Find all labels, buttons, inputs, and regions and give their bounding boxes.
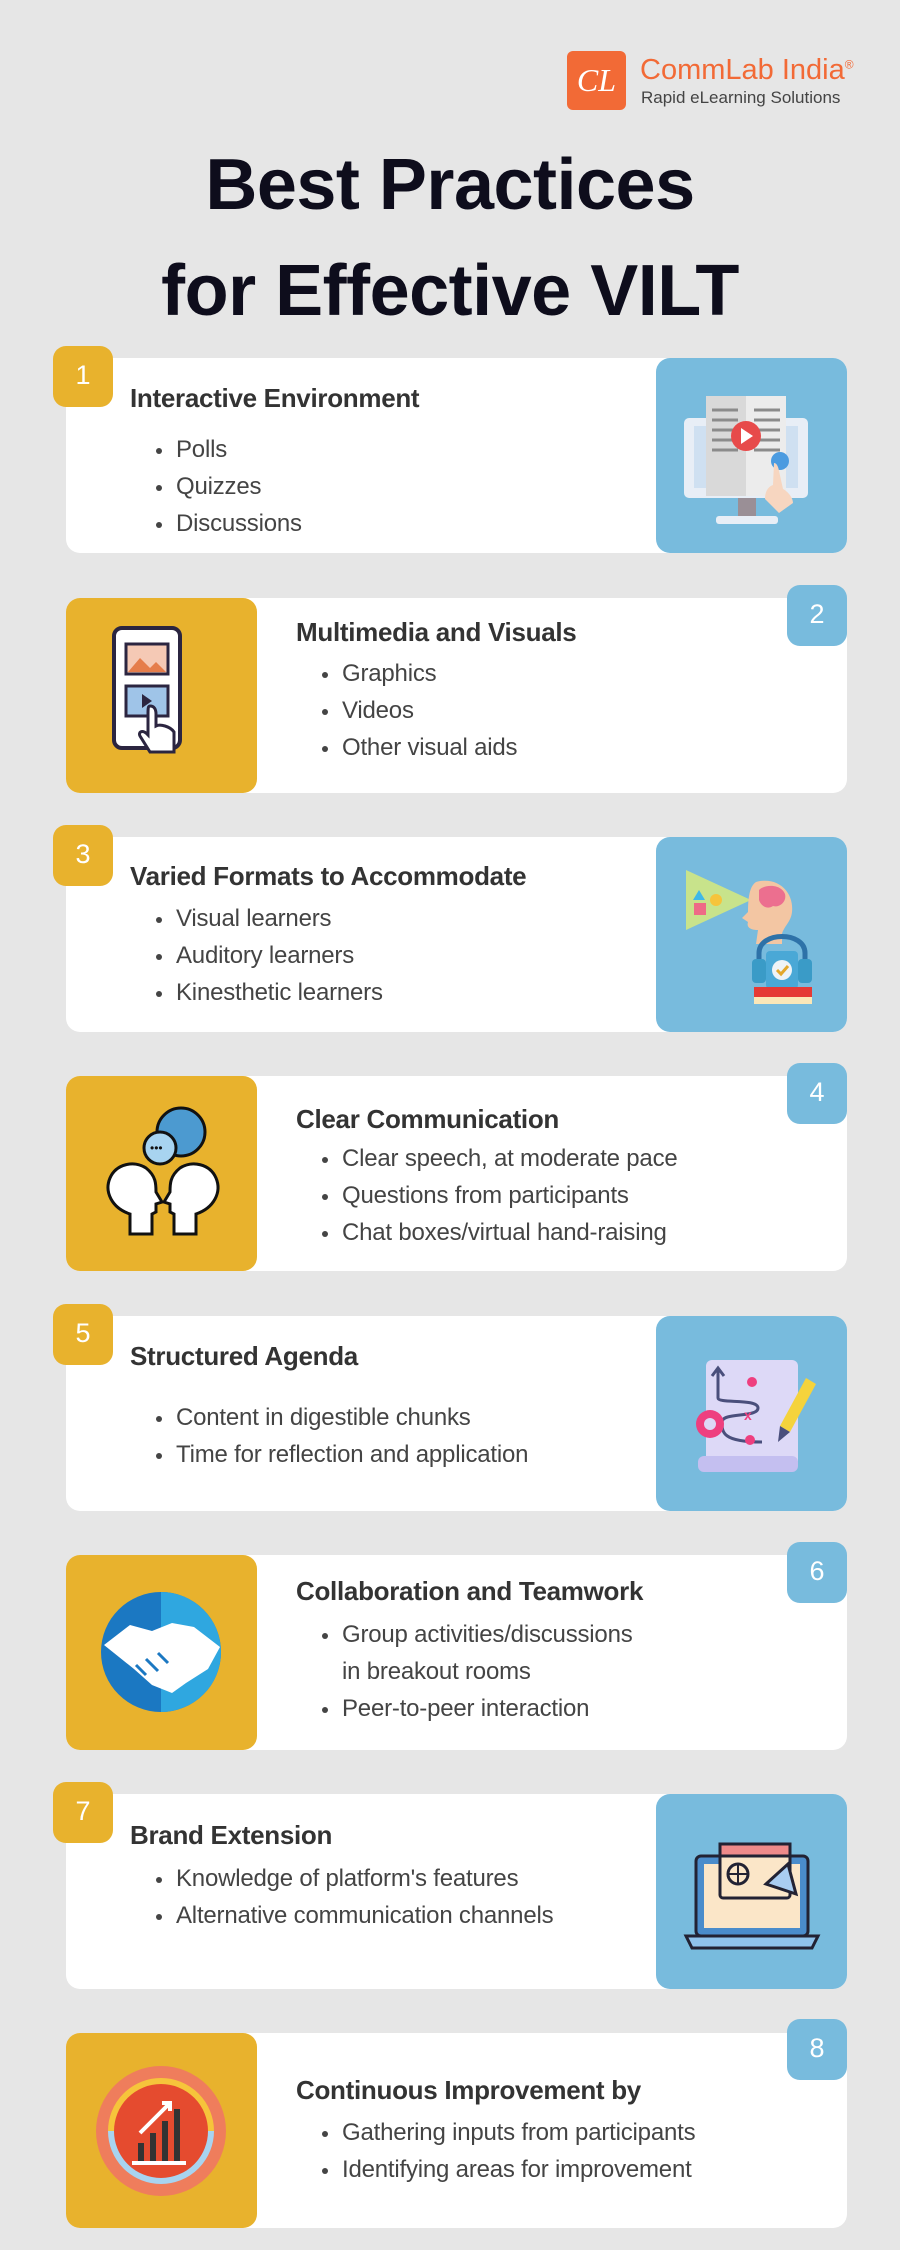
bullets [322,660,517,761]
badge 3: 3 [75,839,91,869]
bullets [322,1145,678,1246]
heading: Varied Formats to Accommodate [130,861,526,891]
badge 8 [787,2019,847,2080]
badge 2 [787,585,847,646]
bullets: Knowledge of platform's features [176,1865,518,1892]
icon: laptop with globe and megaphone [656,1794,847,1989]
badge 1 [53,346,113,407]
panel: 2 Multimedia and Visuals [66,598,847,793]
bullets [322,1621,633,1722]
bullets: Questions from participants [342,1182,629,1209]
title [161,145,739,331]
badge 6: 6 [809,1556,825,1586]
badge 6 [787,1542,847,1603]
bullets: Visual learners [176,905,331,932]
heading: Collaboration and Teamwork [296,1576,643,1606]
title: Best Practices [205,145,695,225]
bullets [156,905,383,1006]
badge 5: 5 [75,1318,91,1348]
bullets: Auditory learners [176,942,354,969]
bullets: Discussions [176,510,302,537]
panel: 6 Collaboration and Teamwork [66,1555,847,1750]
logo mark: CL [577,62,616,98]
logo mark [567,51,626,110]
badge 7 [53,1782,113,1843]
badge 4: 4 [809,1077,825,1107]
logo: Rapid eLearning Solutions [641,88,840,107]
bullets: Videos [342,697,414,724]
badge 3 [53,825,113,886]
logo [567,51,854,110]
badge 1: 1 [75,360,91,390]
bullets: Time for reflection and application [176,1441,528,1468]
icon: growth chart circle [66,2033,257,2228]
bullets: Alternative communication channels [176,1902,553,1929]
logo text: CommLab India® [640,54,854,86]
icon: two heads talking [66,1076,257,1271]
panel: 8 Continuous Improvement [66,2033,847,2228]
badge 7: 7 [75,1796,91,1826]
bullets: Content in digestible chunks [176,1404,471,1431]
bullets: Kinesthetic learners [176,979,383,1006]
icon: two heads talking: ••• [150,1141,163,1155]
panel: 5 Structured Agenda [66,1316,847,1511]
panel: 1 Interactive Environment [66,358,847,553]
icon: monitor with book [656,358,847,553]
bullets: Quizzes [176,473,261,500]
bullets: Other visual aids [342,734,517,761]
bullets [156,436,302,537]
badge 2: 2 [809,599,825,629]
bullets: Peer-to-peer interaction [342,1695,589,1722]
icon: plan with pencil: x [744,1407,752,1423]
panel: 4 Clear Communication [66,1076,847,1271]
bullets: Graphics [342,660,436,687]
badge 4 [787,1063,847,1124]
bullets: Clear speech, at moderate pace [342,1145,678,1172]
bullets: Chat boxes/virtual hand-raising [342,1219,667,1246]
heading: Continuous Improvement by [296,2075,641,2105]
bullets: Gathering inputs from participants [342,2119,695,2146]
title: for Effective VILT [161,251,739,331]
panel: 7 Brand Extension [66,1794,847,1989]
bullets: Polls [176,436,227,463]
bullets: Group activities/discussions [342,1621,633,1648]
bullets [156,1865,553,1929]
icon: multimedia tablet [66,598,257,793]
heading: Brand Extension [130,1820,332,1850]
heading: Multimedia and Visuals [296,617,576,647]
heading: Structured Agenda [130,1341,358,1371]
badge 5 [53,1304,113,1365]
bullets: in breakout rooms [342,1658,531,1685]
badge 8: 8 [809,2033,825,2063]
panel: 3 Varied Formats [66,837,847,1032]
bullets: Identifying areas for improvement [342,2156,692,2183]
icon: plan with pencil [656,1316,847,1511]
bullets [322,2119,695,2183]
icon: handshake [66,1555,257,1750]
bullets [156,1404,528,1468]
heading: Interactive Environment [130,383,419,413]
icon: learner head and headphones [656,837,847,1032]
heading: Clear Communication [296,1104,559,1134]
